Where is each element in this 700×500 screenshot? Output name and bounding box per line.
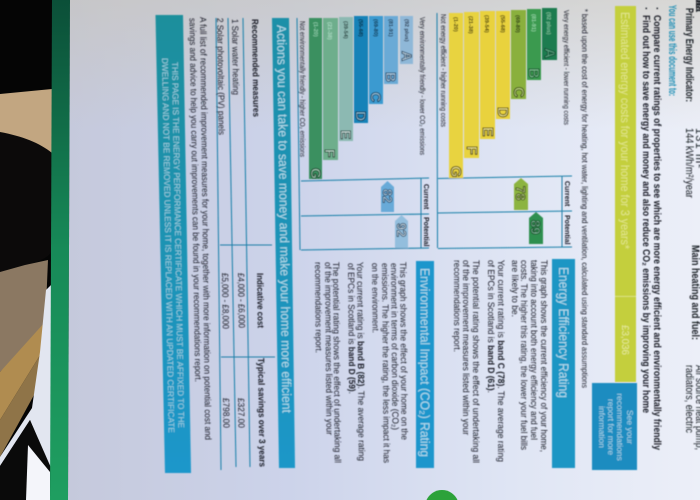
callout: see recommendations report: recommendations (615, 393, 625, 461)
explanation text: This graph shows the effect of your home on the (398, 262, 410, 440)
heading band: Actions you can take to save money and make your home more efficient (274, 25, 294, 413)
bars: (92 plus) (403, 19, 409, 42)
heading band: Environmental Impact (CO₂) Rating (418, 268, 432, 457)
explanation text: costs. The higher this rating, the lower your fuel bills (519, 260, 529, 450)
band letters: B (525, 68, 541, 78)
chart frame (437, 13, 572, 248)
band letters: C (510, 87, 526, 98)
header details: Primary Energy Indicator: (683, 8, 695, 102)
band letters (308, 51, 415, 179)
bars: (21-38) (326, 22, 332, 40)
explanation text: on the environment. (370, 263, 381, 333)
heading band: Energy Efficiency Rating (556, 267, 572, 398)
table: recommended measures: £798.00 (221, 398, 231, 428)
explanation text: recommendations report. (452, 260, 462, 352)
explanation text: of the improvement measures listed within your (323, 262, 335, 435)
arrow: potential 92 (394, 215, 408, 248)
chart: environmental impact rating: Very environmentally friendly - lower CO₂ emissions (418, 17, 425, 155)
band letters: G (447, 166, 463, 177)
header details (683, 0, 700, 450)
bars: (92 plus) (545, 12, 551, 35)
banner: estimated energy costs: £3,036 (619, 325, 630, 355)
table: recommended measures: £327.00 (236, 398, 246, 428)
band letters: B (383, 72, 399, 82)
column labels: Current (422, 184, 429, 210)
band letters: F (322, 149, 338, 158)
chart frame (297, 18, 429, 250)
table: recommended measures: Indicative cost (255, 273, 266, 328)
bars: (69-80) (514, 15, 520, 33)
band letters: D (494, 107, 510, 117)
bars: (55-68) (357, 19, 363, 37)
explanation text: environment in terms of carbon dioxide (CO₂) (389, 263, 400, 430)
green circle sticker (426, 490, 458, 500)
column labels: Potential (563, 215, 570, 245)
bullet list: · (640, 7, 651, 10)
explanation text: Your current rating is band C (78). The average rating (496, 260, 506, 462)
explanation text: taking into account both energy efficiency and fuel (529, 260, 539, 440)
bullet list: Find out how to save energy and money and also reduce CO₂ emissions by improving your home (640, 15, 651, 413)
explanation text: This graph shows the current efficiency of your home, (539, 260, 549, 452)
banner: estimated energy costs: Estimated energy costs for your home for 3 years* (618, 12, 632, 249)
footer banner (156, 15, 191, 473)
footnote: * based upon the cost of energy for heating, hot water, lighting and ventilation, calculated using standard assumptions (580, 9, 589, 388)
table: recommended measures: Typical savings over 3 years (256, 358, 268, 467)
panel: environmental impact rating (313, 261, 434, 468)
column labels: Potential (422, 217, 429, 247)
callout: see recommendations report (592, 383, 637, 470)
band letters: A (399, 51, 415, 61)
bars: (1-20) (312, 22, 318, 37)
bars (449, 8, 557, 178)
callout: see recommendations report: See your (625, 410, 635, 444)
chart: environmental impact rating (297, 16, 429, 250)
explanation text (313, 262, 410, 463)
arrow: current 78 (513, 178, 528, 210)
explanation text: The potential rating shows the effect of undertaking all (331, 262, 343, 463)
band letters: A (541, 48, 557, 59)
arrow: current 82: 82 (380, 189, 394, 203)
header details: radiators, electric (683, 365, 695, 433)
table rules (216, 18, 275, 470)
chart: energy efficiency rating (437, 8, 572, 248)
explanation text: of EPCs in Scotland is band D (59). (346, 263, 357, 394)
bars: (69-80) (372, 19, 378, 37)
arrow: current 82 (380, 181, 394, 212)
heading band (552, 259, 575, 468)
chart: energy efficiency rating: Not energy efficient - higher running costs (439, 14, 446, 127)
bars: (81-91) (530, 14, 536, 32)
header details: 144 kWh/m²/year (683, 128, 695, 198)
column labels: Current (563, 181, 570, 207)
background: dark surface behind document (0, 0, 56, 500)
explanation text: are likely to be. (510, 260, 520, 317)
paragraph: recommendations note (188, 17, 213, 440)
chart: environmental impact rating: Not environmentally friendly - higher CO₂ emissions (298, 21, 305, 157)
bars (309, 16, 413, 179)
footer banner: THIS PAGE IS THE ENERGY PERFORMANCE CERTIFICATE WHICH MUST BE AFFIXED TO THE (170, 62, 186, 428)
paragraph: recommendations note: A full list of recommended improvement measures for your home, together with more information on potential cost and (198, 17, 213, 440)
heading: you can use this document: You can use this document to: (666, 5, 678, 96)
table: recommended measures: 2 Solar photovoltaic (PV) panels (215, 18, 227, 135)
explanation text: The potential rating shows the effect of undertaking all (471, 260, 481, 463)
panel: energy efficiency rating (452, 259, 575, 468)
panel: actions you can take (188, 17, 295, 470)
callout: see recommendations report: information (597, 406, 607, 448)
explanation text: of the improvement measures listed within your (461, 260, 471, 435)
bullet list (640, 7, 662, 450)
band letters: G (308, 168, 324, 179)
explanation text: emissions. The higher the rating, the less impact it has (380, 263, 392, 463)
bars: (1-20) (452, 17, 458, 32)
table: recommended measures (215, 18, 268, 467)
band letters: F (463, 146, 479, 155)
bars: (55-68) (499, 15, 505, 33)
banner: estimated energy costs (615, 6, 636, 382)
explanation text: recommendations report. (313, 262, 324, 353)
green binder strip (50, 0, 70, 500)
band letters: D (353, 111, 369, 121)
band letters (447, 48, 557, 177)
footer banner: DWELLING AND NOT BE REMOVED UNLESS IT IS REPLACED WITH AN UPDATED CERTIFICATE (160, 58, 177, 433)
bars: (21-38) (467, 16, 473, 34)
band letters: C (368, 92, 384, 102)
arrow: potential 89: 89 (528, 220, 543, 234)
explanation text: Your current rating is band B (82). The average rating (355, 262, 367, 461)
bullet list: · (651, 7, 662, 10)
arrow: current 78: 78 (513, 186, 528, 200)
band letters: E (479, 127, 495, 137)
table: recommended measures: £5,000 - £8,000 (220, 273, 231, 329)
explanation text: of EPCs in Scotland is band D (61). (486, 260, 496, 393)
chart: energy efficiency rating: Very energy efficient - lower running costs (562, 10, 569, 125)
bars: (39-54) (483, 15, 489, 33)
bars: (39-54) (342, 21, 348, 39)
table: recommended measures: £4,000 - £6,000 (236, 273, 247, 328)
column labels (563, 181, 570, 245)
callout: see recommendations report: report for more (606, 399, 616, 455)
explanation text (452, 260, 549, 463)
column labels (422, 184, 429, 247)
arrow: potential 89 (528, 212, 543, 244)
arrow: potential 92: 92 (394, 223, 408, 237)
band letters: E (338, 130, 354, 139)
table: recommended measures: 1 Solar water heating (230, 19, 241, 95)
bars: (81-91) (387, 19, 393, 37)
table: recommended measures: Recommended measures (250, 19, 261, 117)
paragraph: recommendations note: savings and advice to help you carry out improvements can be found in your recommendations report. (188, 18, 203, 382)
